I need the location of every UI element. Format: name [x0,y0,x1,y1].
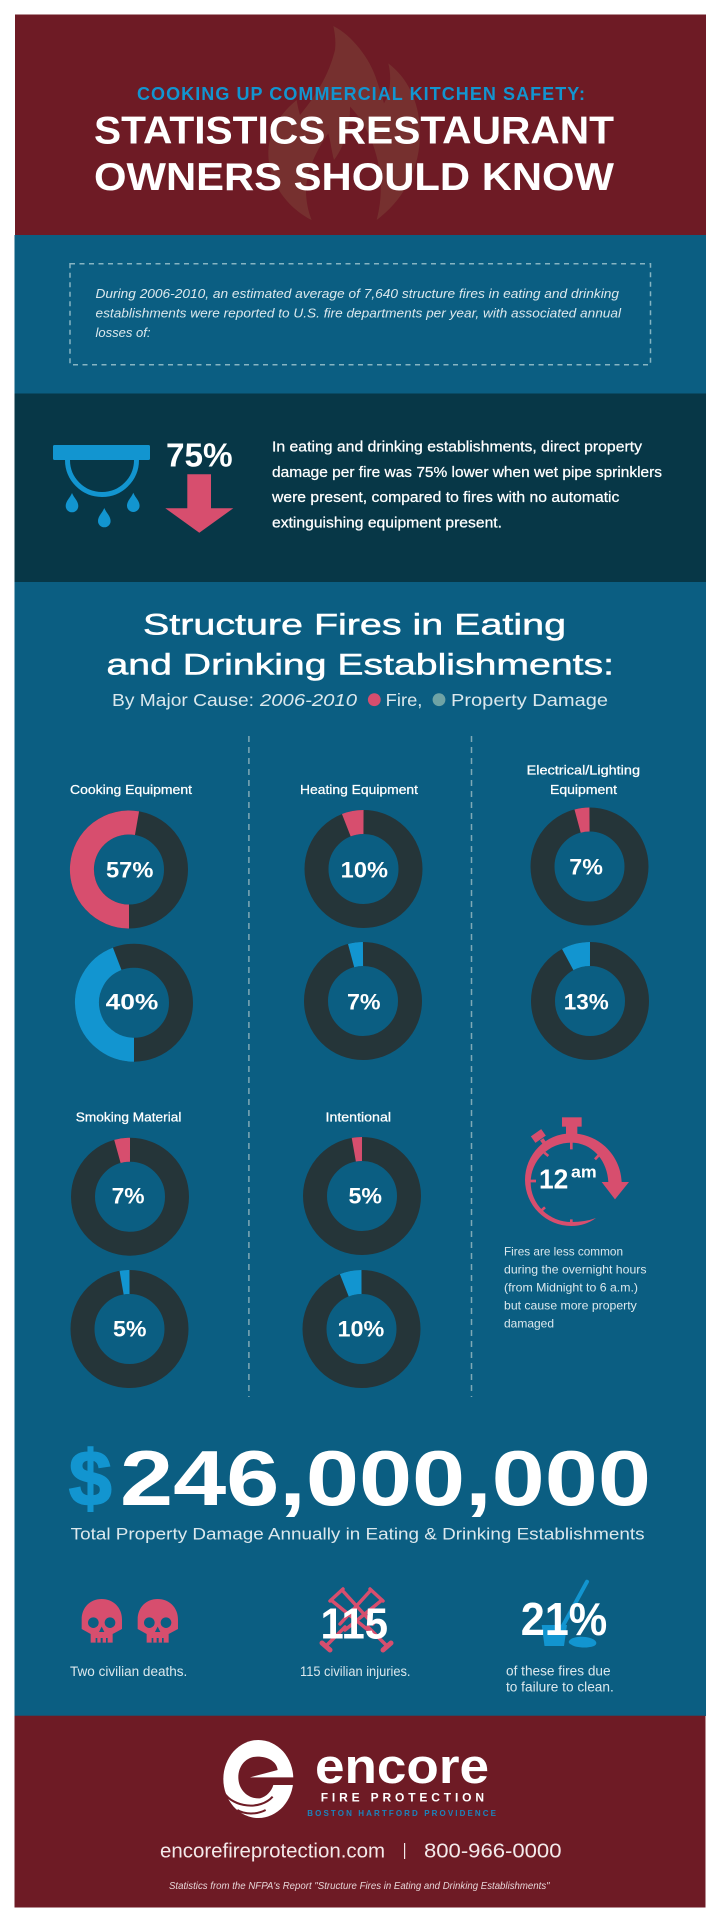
icon: crutches with 115: 115 [320,1599,388,1648]
clock note: during the overnight hours [504,1262,646,1276]
title: OWNERS SHOULD KNOW [94,156,614,199]
caption: failure to clean: to failure to clean. [506,1680,614,1695]
donut: heating fire 10% [316,822,410,916]
donut: electrical fire 7%: 7% [569,854,603,879]
sprinkler text: were present, compared to fires with no automatic [271,490,619,506]
section heading: and Drinking Establishments: [106,648,614,681]
arrow: down [165,474,233,533]
donut: cooking fire 57%: 57% [106,857,153,882]
donut: intentional fire 5% [315,1149,409,1243]
total damage figure: $ [69,1434,112,1522]
caption: failure to clean [506,1664,614,1695]
donut: electrical damage 13% [543,954,637,1048]
label: cooking equipment: Cooking Equipment [70,783,193,797]
icon: stopwatch 12am: am [571,1162,597,1181]
clock note: damaged [504,1316,554,1330]
panel: structure fires [14,582,706,1716]
total damage caption: Total Property Damage Annually in Eating & Drinking Establishments [71,1524,645,1543]
panel: intro [14,235,706,394]
donut: heating damage 7%: 7% [347,989,381,1014]
stat: 75%: 75% [166,436,233,474]
intro text: losses of: [96,325,151,340]
legend: By Major Cause: [112,690,254,710]
panel: sprinkler stat [14,394,706,582]
legend [112,690,608,710]
icon: stopwatch 12am [525,1117,629,1226]
icon: flame watermark [268,26,420,220]
label: electrical equipment: Equipment [550,783,618,797]
logo: encore: BOSTON HARTFORD PROVIDENCE [307,1809,497,1818]
logo: encore: encore [315,1740,489,1794]
sprinkler text: extinguishing equipment present. [272,515,502,531]
title [94,110,614,199]
section heading [106,608,614,681]
label: heating equipment: Heating Equipment [300,783,419,797]
total damage figure: 246,000,000 [120,1434,651,1522]
contact line: encorefireprotection.com [160,1840,385,1862]
legend: 2006-2010 [259,690,357,710]
clock note: Fires are less common [504,1244,623,1258]
contact line [160,1840,562,1862]
subtitle: COOKING UP COMMERCIAL KITCHEN SAFETY: [137,84,585,104]
label: electrical equipment: Electrical/Lighting [527,763,640,777]
caption: failure to clean: of these fires due [506,1664,611,1679]
clock note: (from Midnight to 6 a.m.) [504,1280,638,1294]
icon: stopwatch 12am: 12 [539,1163,568,1194]
section heading: Structure Fires in Eating [143,608,566,641]
donut: intentional damage 10%: 10% [338,1317,384,1342]
donut: heating fire 10%: 10% [341,857,388,882]
legend: Fire, [386,690,422,710]
label: intentional: Intentional [326,1110,391,1124]
label: smoking material: Smoking Material [76,1110,181,1124]
intro text: establishments were reported to U.S. fire departments per year, with associated annual [96,306,622,320]
donut: intentional fire 5%: 5% [348,1183,382,1208]
title: STATISTICS RESTAURANT [94,110,614,152]
icon: mop bucket with 21%: 21% [521,1593,607,1645]
donut: intentional damage 10% [314,1282,408,1376]
intro text: During 2006-2010, an estimated average of 7,640 structure fires in eating and drinking [96,286,620,301]
panel: footer [14,1716,706,1908]
donut: smoking damage 5%: 5% [113,1317,146,1342]
sprinkler text [271,440,662,531]
donut: smoking fire 7% [83,1150,177,1244]
icon: sprinkler [53,445,150,527]
panel: header [15,14,706,235]
caption: injuries: 115 civilian injuries. [300,1664,410,1679]
source note: Statistics from the NFPA's Report "Structure Fires in Eating and Drinking Establishments" [169,1881,550,1892]
logo: encore [223,1740,497,1818]
intro text [96,286,622,340]
icon: two skulls [82,1599,178,1643]
caption: deaths: Two civilian deaths. [70,1664,187,1679]
donut: cooking damage 40%: 40% [106,989,158,1014]
label: electrical equipment [527,763,640,797]
legend: Property Damage [451,690,608,710]
donut: smoking damage 5% [82,1282,176,1376]
clock note [504,1244,646,1330]
sprinkler text: In eating and drinking establishments, direct property [272,440,643,456]
sprinkler text: damage per fire was 75% lower when wet pipe sprinklers [272,465,662,481]
contact line: 800-966-0000 [424,1840,562,1862]
clock note: but cause more property [504,1298,637,1312]
donut: smoking fire 7%: 7% [112,1183,145,1208]
donut: electrical damage 13%: 13% [564,989,609,1014]
donut: electrical fire 7% [542,820,636,914]
donut: cooking damage 40% [87,956,181,1050]
donut: heating damage 7% [316,954,410,1048]
logo: encore: FIRE PROTECTION [321,1791,484,1805]
donut: cooking fire 57% [82,822,176,916]
